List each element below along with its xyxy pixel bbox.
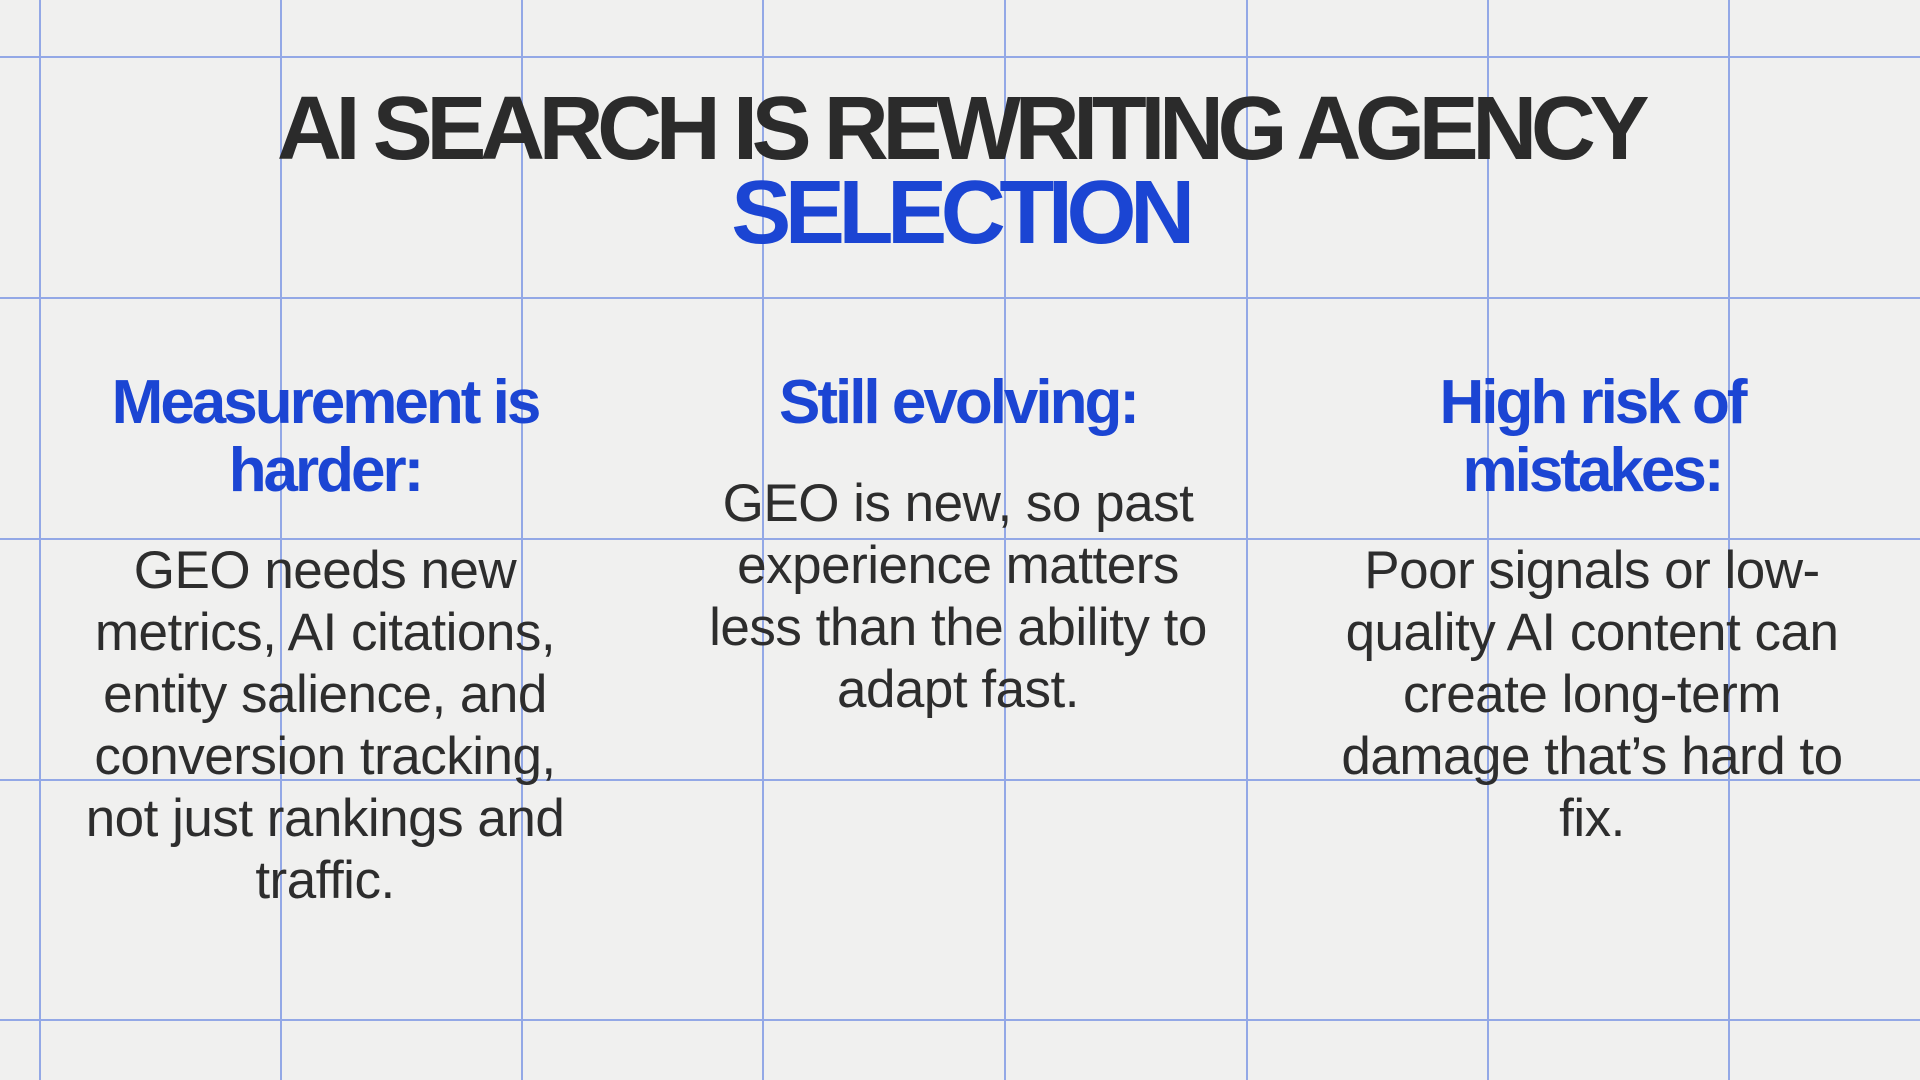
body: measurement: entity salience, and [103,665,547,724]
title [277,79,1648,263]
body: evolving: GEO is new, so past [723,474,1193,533]
panel: risk [1341,368,1843,848]
title line 1: AI SEARCH IS REWRITING AGENCY [277,79,1643,179]
panel: evolving [709,368,1207,719]
body: evolving: less than the ability to [709,598,1207,657]
heading: risk [1439,368,1748,505]
heading: risk: High risk of [1439,368,1745,437]
body: measurement: conversion tracking, [94,727,556,786]
body: risk: fix. [1559,789,1625,848]
body: measurement: not just rankings and [86,789,564,848]
heading: evolving: Still evolving: [779,368,1137,437]
body: risk [1341,541,1843,848]
body: risk: quality AI content can [1346,603,1838,662]
title line 2: SELECTION [731,163,1189,263]
body: risk: create long-term [1403,665,1781,724]
body: measurement: metrics, AI citations, [95,603,555,662]
body: risk: damage that’s hard to [1341,727,1843,786]
body: measurement [86,541,564,910]
body: risk: Poor signals or low- [1364,541,1820,600]
body: evolving [709,474,1207,719]
heading: measurement: harder: [229,436,421,505]
body: measurement: traffic. [255,851,395,910]
heading: risk: mistakes: [1462,436,1722,505]
heading: measurement: Measurement is [112,368,538,437]
body: measurement: GEO needs new [134,541,516,600]
heading: measurement [112,368,539,505]
body: evolving: experience matters [737,536,1179,595]
panel: measurement [86,368,564,910]
body: evolving: adapt fast. [837,660,1079,719]
